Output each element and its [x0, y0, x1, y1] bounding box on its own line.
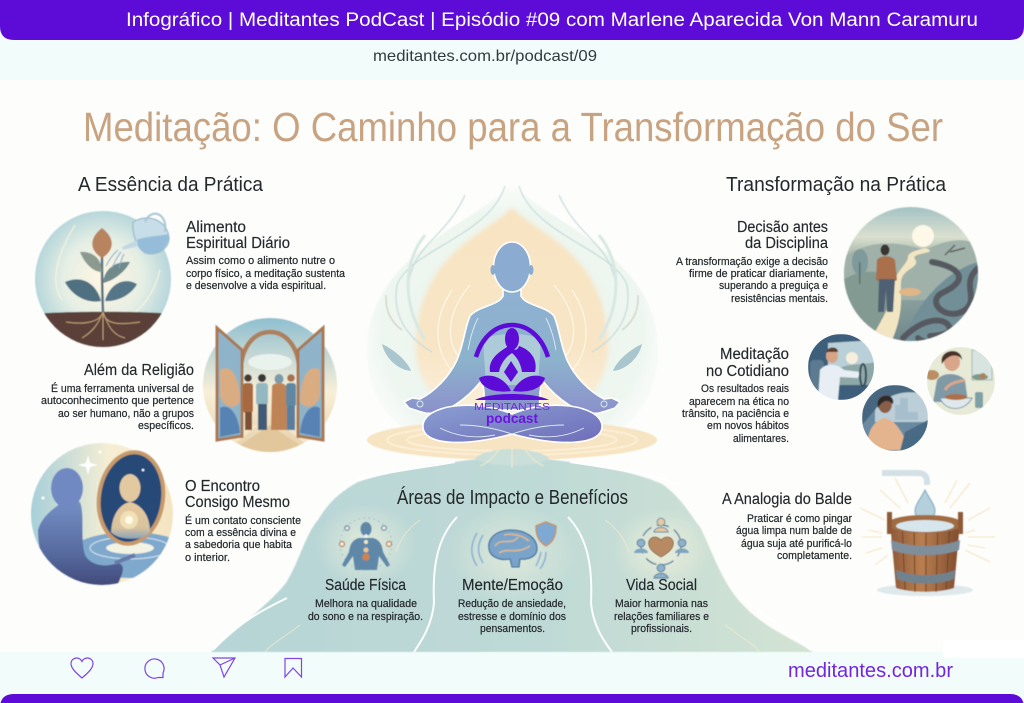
text: Decisão antes da Disciplina: Decisão antes — [737, 219, 828, 236]
footer url: meditantes.com.br — [788, 660, 953, 682]
card: Mente/Emoção: Mente/Emoção — [462, 577, 563, 594]
text: A Analogia do Balde: água limpa num balde de — [736, 525, 852, 537]
heading: A Essência da Prática: A Essência da Prática — [78, 174, 264, 196]
icon: bookmark — [285, 658, 302, 677]
text: Decisão antes da Disciplina: da Disciplina — [745, 235, 828, 252]
text: A Analogia do Balde: A Analogia do Balde — [722, 491, 852, 508]
icon: brain and shield — [472, 522, 556, 569]
text: Decisão antes da Disciplina: superando a preguiça e — [719, 280, 828, 292]
heading: Áreas de Impacto e Benefícios: Áreas de Impacto e Benefícios — [397, 486, 628, 509]
text: Além da Religião: autoconhecimento que pertence — [41, 395, 194, 407]
text: O Encontro Consigo Mesmo: O Encontro — [185, 478, 260, 495]
logo: Meditantes podcast: MEDITANTES — [474, 401, 550, 413]
card: Saúde Física: Melhora na qualidade — [315, 598, 417, 610]
text: O Encontro Consigo Mesmo: a sabedoria que habita — [185, 539, 293, 551]
card: Saúde Física: Saúde Física — [325, 577, 406, 594]
icon: man driving — [808, 334, 875, 400]
card: Vida Social: Maior harmonia nas — [615, 598, 708, 610]
text: Decisão antes da Disciplina: firme de praticar diariamente, — [689, 268, 828, 280]
card: Saúde Física — [308, 577, 423, 623]
heading: Transformação na Prática: Transformação na Prática — [726, 174, 947, 196]
card: Vida Social — [614, 577, 709, 635]
text: A Analogia do Balde: água suja até purificá-lo — [741, 538, 852, 550]
icon: person facing mirror — [30, 442, 174, 586]
footer bar — [0, 694, 1024, 703]
text: Meditação no Cotidiano: aparecem na ética no — [689, 396, 789, 408]
logo: Meditantes podcast — [474, 325, 550, 426]
text: Além da Religião: específicos. — [138, 420, 194, 432]
text: Meditação no Cotidiano: em novos hábitos — [707, 420, 789, 432]
text: Alimento Espiritual Diário: Espiritual Diário — [186, 235, 290, 252]
icon: path and decision — [843, 207, 979, 345]
icon: water bucket and tap — [860, 473, 995, 596]
text: Além da Religião — [41, 362, 194, 432]
text: Meditação no Cotidiano — [682, 346, 789, 445]
header bar — [0, 0, 1024, 40]
text: O Encontro Consigo Mesmo — [185, 478, 301, 564]
text: Alimento Espiritual Diário: corpo físico, a meditação sustenta — [186, 268, 346, 280]
text: Meditação no Cotidiano: Meditação — [720, 346, 789, 363]
text: Meditação no Cotidiano: alimentares. — [733, 433, 789, 445]
text: Além da Religião: ao ser humano, não a grupos — [58, 408, 194, 420]
text: A Analogia do Balde: completamente. — [777, 550, 852, 562]
header bar: Infográfico | Meditantes PodCast | Episódio #09 com Marlene Aparecida Von Mann Caramuru — [126, 10, 978, 31]
title: Meditação: O Caminho para a Transformação do Ser — [83, 104, 943, 150]
icon: heart — [71, 658, 93, 678]
card: Mente/Emoção — [458, 577, 566, 635]
icon: woman in car — [862, 385, 928, 451]
card: Vida Social: relações familiares e — [614, 611, 709, 623]
text: Além da Religião: Além da Religião — [84, 362, 194, 379]
text: O Encontro Consigo Mesmo: É um contato consciente — [185, 514, 301, 527]
card: Mente/Emoção: estresse e domínio dos — [458, 611, 566, 623]
text: Alimento Espiritual Diário: e desenvolve a vida espiritual. — [186, 280, 326, 292]
card: Mente/Emoção: Redução de ansiedade, — [458, 598, 566, 610]
text: O Encontro Consigo Mesmo: com a essência divina e — [185, 527, 296, 539]
text: Além da Religião: É uma ferramenta universal de — [51, 382, 194, 395]
meditating figure — [404, 242, 620, 442]
text: Alimento Espiritual Diário: Alimento — [186, 219, 246, 236]
text: O Encontro Consigo Mesmo: o interior. — [185, 552, 230, 564]
flat lotus base — [367, 420, 657, 468]
text: Alimento Espiritual Diário: Assim como o alimento nutre o — [186, 255, 335, 267]
text: Decisão antes da Disciplina — [676, 219, 828, 305]
card: Saúde Física: do sono e na respiração. — [308, 611, 423, 623]
text: Decisão antes da Disciplina: resistências mentais. — [731, 293, 828, 305]
text: O Encontro Consigo Mesmo: Consigo Mesmo — [185, 494, 290, 511]
icon: people and handshake — [634, 518, 689, 578]
icon: send — [213, 658, 235, 677]
icon: plant being watered — [35, 211, 171, 347]
card: Vida Social: profissionais. — [631, 623, 692, 635]
icon: open door with people — [203, 318, 337, 452]
central halo illustration — [367, 183, 658, 455]
panel: hill, areas of impact — [211, 455, 813, 652]
icon: comment — [145, 659, 164, 678]
text: Meditação no Cotidiano: trânsito, na paciência e — [682, 408, 789, 420]
card: Mente/Emoção: pensamentos. — [480, 623, 545, 635]
logo: Meditantes podcast: podcast — [486, 410, 538, 426]
text: Meditação no Cotidiano: no Cotidiano — [706, 363, 789, 380]
text: Meditação no Cotidiano: Os resultados reais — [701, 383, 789, 395]
icon: body with chakras — [340, 518, 392, 570]
card: Vida Social: Vida Social — [626, 577, 697, 594]
podcast url: meditantes.com.br/podcast/09 — [373, 48, 597, 65]
icon: woman eating — [925, 347, 995, 415]
text: Alimento Espiritual Diário — [186, 219, 346, 292]
text: Decisão antes da Disciplina: A transformação exige a decisão — [676, 256, 828, 268]
text: A Analogia do Balde — [722, 491, 852, 562]
text: A Analogia do Balde: Praticar é como pingar — [747, 513, 852, 525]
